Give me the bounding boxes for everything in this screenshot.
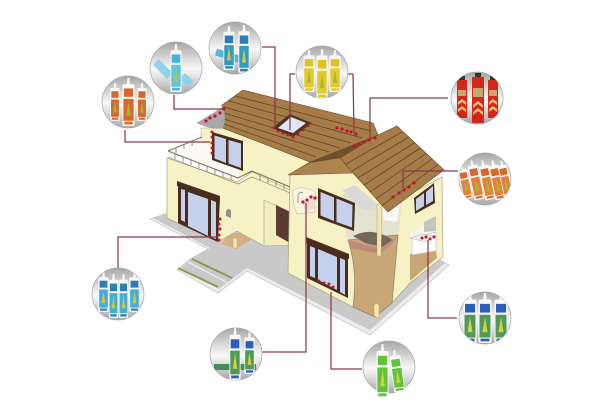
- balcony railings: [168, 137, 290, 193]
- right block walls: [288, 160, 443, 317]
- bathroom detail: [293, 188, 316, 214]
- product circle: red cans: [451, 72, 503, 124]
- lower front wall: [167, 158, 291, 246]
- side wall window: [414, 183, 435, 214]
- kitchen cut-away: [410, 216, 437, 281]
- roof hip cap: [197, 107, 225, 128]
- product circle: two blue tubes: [209, 22, 261, 74]
- product circle: two light green tubes: [363, 341, 415, 398]
- leader lines: [118, 47, 458, 369]
- main roof: [222, 90, 378, 162]
- product circle: five orange tubes: [457, 153, 513, 205]
- product circle: single blue tube: [150, 42, 202, 94]
- entry steps: [178, 259, 232, 287]
- porch post: [377, 204, 382, 256]
- wall lamp: [226, 209, 231, 218]
- product circle: orange tubes: [102, 76, 154, 128]
- right block upper window: [318, 188, 355, 231]
- upper storey wall: [201, 128, 340, 190]
- product circle: yellow tubes: [296, 46, 348, 99]
- skylight: [272, 114, 312, 137]
- red sealant points: [204, 107, 436, 289]
- balcony floor: [168, 140, 240, 180]
- recessed entry door: [264, 200, 290, 246]
- patio door: [177, 181, 220, 242]
- gable ridge band: [288, 135, 378, 175]
- right block lower window: [306, 237, 349, 298]
- corner post: [374, 304, 379, 318]
- ground slab: [150, 200, 449, 335]
- cut-away shaft: [348, 232, 398, 317]
- product circle: four blue tubes: [92, 268, 144, 320]
- front gable roof: [340, 126, 444, 212]
- gable side slope: [288, 158, 352, 175]
- upper window: [212, 132, 243, 171]
- entry arch with post: [221, 233, 251, 249]
- product circle: three green tubes: [459, 292, 511, 344]
- product circle: two green tubes: [210, 328, 262, 380]
